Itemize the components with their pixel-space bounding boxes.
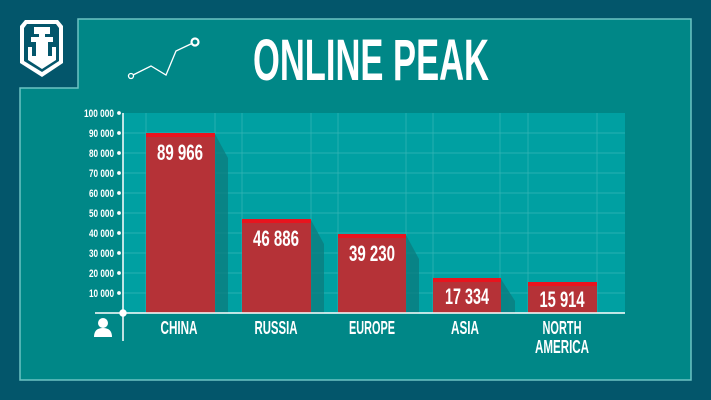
y axis labels: 30 000 [89,248,114,260]
x axis labels [160,318,589,357]
logo: shield with anchor [20,20,63,77]
axes [95,113,625,341]
y axis labels: 90 000 [89,128,114,140]
bar: Europe [338,234,406,313]
bar: Russia: 46 886 [253,226,299,251]
bar: China: 89 966 [157,140,203,165]
icon: user [94,318,112,337]
y axis labels: 10 000 [89,288,114,300]
bar: Russia [242,219,311,313]
y axis labels: 70 000 [89,168,114,180]
y axis labels: 20 000 [89,268,114,280]
bar: North America [528,282,597,313]
bar: North America: 15 914 [540,287,585,312]
y axis labels: 60 000 [89,188,114,200]
y axis labels: 50 000 [89,208,114,220]
icon: line graph [128,38,198,78]
bar: Asia: 17 334 [445,284,489,309]
y axis labels [84,108,120,300]
x axis labels: AMERICA [535,337,589,357]
bar: Asia [433,278,501,313]
x axis labels: CHINA [160,318,198,338]
bar: China [146,133,215,313]
x axis labels: ASIA [451,318,479,338]
chart [84,108,625,341]
x axis labels: EUROPE [349,318,395,338]
bar shadows [215,134,515,313]
title: ONLINE PEAK [253,28,489,93]
y axis labels: 100 000 [84,108,114,120]
y axis labels: 80 000 [89,148,114,160]
x axis labels: RUSSIA [254,318,298,338]
bar: Europe: 39 230 [349,241,395,266]
y axis labels: 40 000 [89,228,114,240]
x axis labels: NORTH [542,318,582,338]
